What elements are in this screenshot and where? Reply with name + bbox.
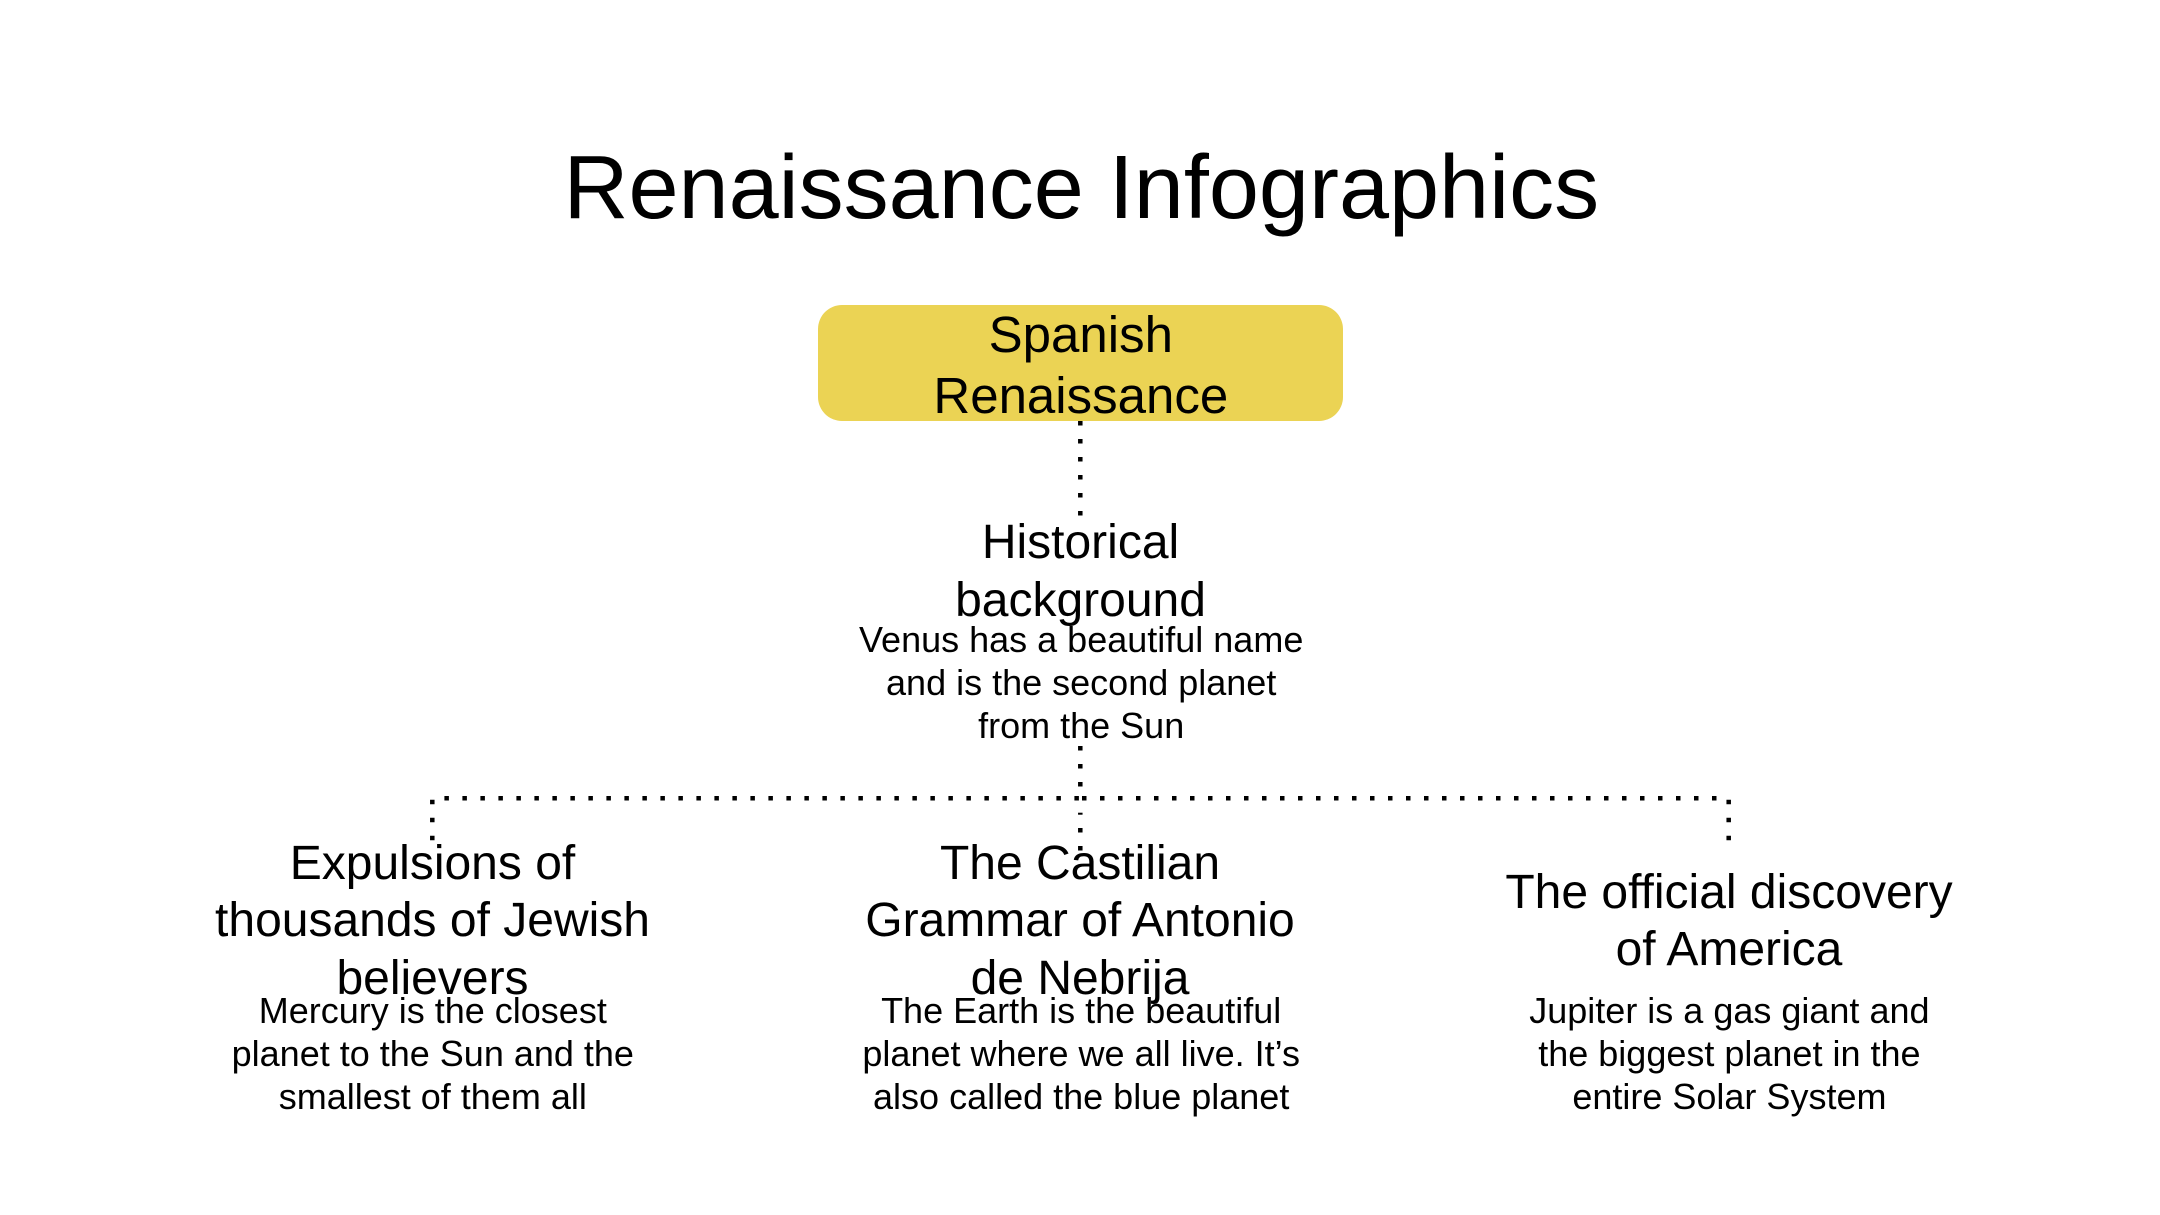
- text: Mercury description: [232, 990, 634, 1117]
- text: Historical background description: [859, 619, 1303, 746]
- main box: Spanish Renaissance: [818, 305, 1343, 421]
- heading: Castilian Grammar: The Castilian: [940, 837, 1220, 890]
- heading: Castilian Grammar: Grammar of Antonio: [865, 894, 1295, 947]
- main box: Spanish Renaissance: Spanish: [989, 306, 1173, 363]
- text: Earth description: also called the blue planet: [873, 1076, 1289, 1117]
- heading: Expulsions: believers: [336, 952, 529, 1005]
- text: Jupiter description: Jupiter is a gas giant and: [1529, 990, 1930, 1031]
- heading: Discovery of America: [1505, 866, 1953, 976]
- heading: Expulsions: thousands of Jewish: [215, 894, 650, 947]
- text: Historical background description: from the Sun: [978, 705, 1184, 746]
- text: Historical background description: and is the second planet: [886, 662, 1276, 703]
- heading: Expulsions: Expulsions of: [290, 837, 575, 890]
- text: Jupiter description: [1529, 990, 1930, 1117]
- text: Mercury description: planet to the Sun and the: [232, 1033, 634, 1074]
- text: Jupiter description: entire Solar System: [1572, 1076, 1886, 1117]
- text: Mercury description: smallest of them all: [279, 1076, 587, 1117]
- text: Mercury description: Mercury is the closest: [259, 990, 607, 1031]
- text: Historical background description: Venus has a beautiful name: [859, 619, 1303, 660]
- text: Earth description: The Earth is the beautiful: [881, 990, 1281, 1031]
- heading: Historical background: Historical: [982, 516, 1179, 569]
- heading: Discovery of America: of America: [1616, 923, 1842, 976]
- text: Earth description: [862, 990, 1300, 1117]
- heading: Historical background: [955, 516, 1206, 627]
- text: Earth description: planet where we all live. It’s: [862, 1033, 1300, 1074]
- main box: Spanish Renaissance: Renaissance: [933, 367, 1228, 424]
- heading: Expulsions: [215, 837, 650, 1005]
- heading: Castilian Grammar: [865, 837, 1295, 1005]
- heading: Historical background: background: [955, 574, 1206, 627]
- heading: Castilian Grammar: de Nebrija: [971, 952, 1189, 1005]
- text: Jupiter description: the biggest planet in the: [1538, 1033, 1921, 1074]
- title: Renaissance Infographics: [563, 138, 1599, 238]
- heading: Discovery of America: The official discovery: [1505, 866, 1953, 918]
